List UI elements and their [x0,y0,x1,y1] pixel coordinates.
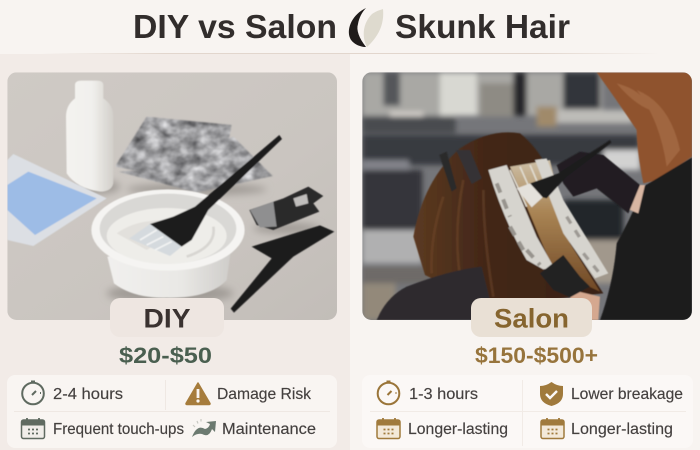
photo: DIY bleach kit on stone surface [7,72,337,320]
title: Skunk Hair [395,8,570,45]
stat: longer-lasting: Longer-lasting [408,421,508,438]
stats: Salon [362,375,693,448]
label: DIY [110,298,224,337]
tint brush [129,224,182,256]
icon: upward arrow [192,419,216,437]
icon: black and white hair strand [349,8,383,47]
black comb [231,225,334,313]
icon: shield with check [540,382,563,406]
stat: maintenance: Maintenance [222,421,316,438]
stat: maintenance [192,419,316,438]
panel: Salon [362,72,693,448]
bottle [66,81,113,192]
stat: longer-lasting second: Longer-lasting [571,421,673,438]
stylist top [600,157,692,320]
icon: stopwatch [22,382,44,404]
label: DIY: DIY [144,304,190,334]
stat: longer-lasting [377,418,508,438]
photo: stylist applying foil highlights in salon [362,72,692,320]
forearm [570,291,600,320]
gloves [557,152,640,213]
stylist hair [597,72,692,183]
icon: calendar [22,418,44,438]
soft shadows [73,179,320,303]
hair clips [439,152,457,192]
title: DIY vs Salon [133,8,337,45]
label: Salon [471,298,592,337]
stat: time [22,382,123,404]
stat: lower breakage [540,382,683,406]
stat: longer-lasting second [541,418,673,438]
stat: lower breakage: Lower breakage [571,386,683,403]
foils [488,165,554,269]
cape [377,267,490,320]
stat: time [378,382,478,404]
icon: warning triangle [186,383,210,404]
stat: damage risk [186,383,312,404]
stat: time: 1-3 hours [409,386,478,403]
stat: damage risk: Damage Risk [217,386,312,403]
lightened section [510,160,600,292]
price: Salon: $150-$500+ [475,343,598,368]
brush [530,140,611,198]
icon: calendar [377,418,400,438]
title [133,8,570,47]
foil sheets [118,137,273,193]
label: Salon: Salon [494,304,569,334]
hair [413,132,603,303]
stats: DIY [7,375,337,448]
bowl [107,252,231,298]
stat: touch-ups [22,418,184,438]
black clip [249,187,323,230]
price: DIY: $20-$50 [119,343,212,368]
panel: DIY [7,72,337,448]
stat: time: 2-4 hours [53,386,123,403]
icon: stopwatch [378,382,399,404]
blue powder packet [7,154,107,246]
stat: touch-ups: Frequent touch-ups [53,421,184,438]
icon: calendar [541,418,564,438]
